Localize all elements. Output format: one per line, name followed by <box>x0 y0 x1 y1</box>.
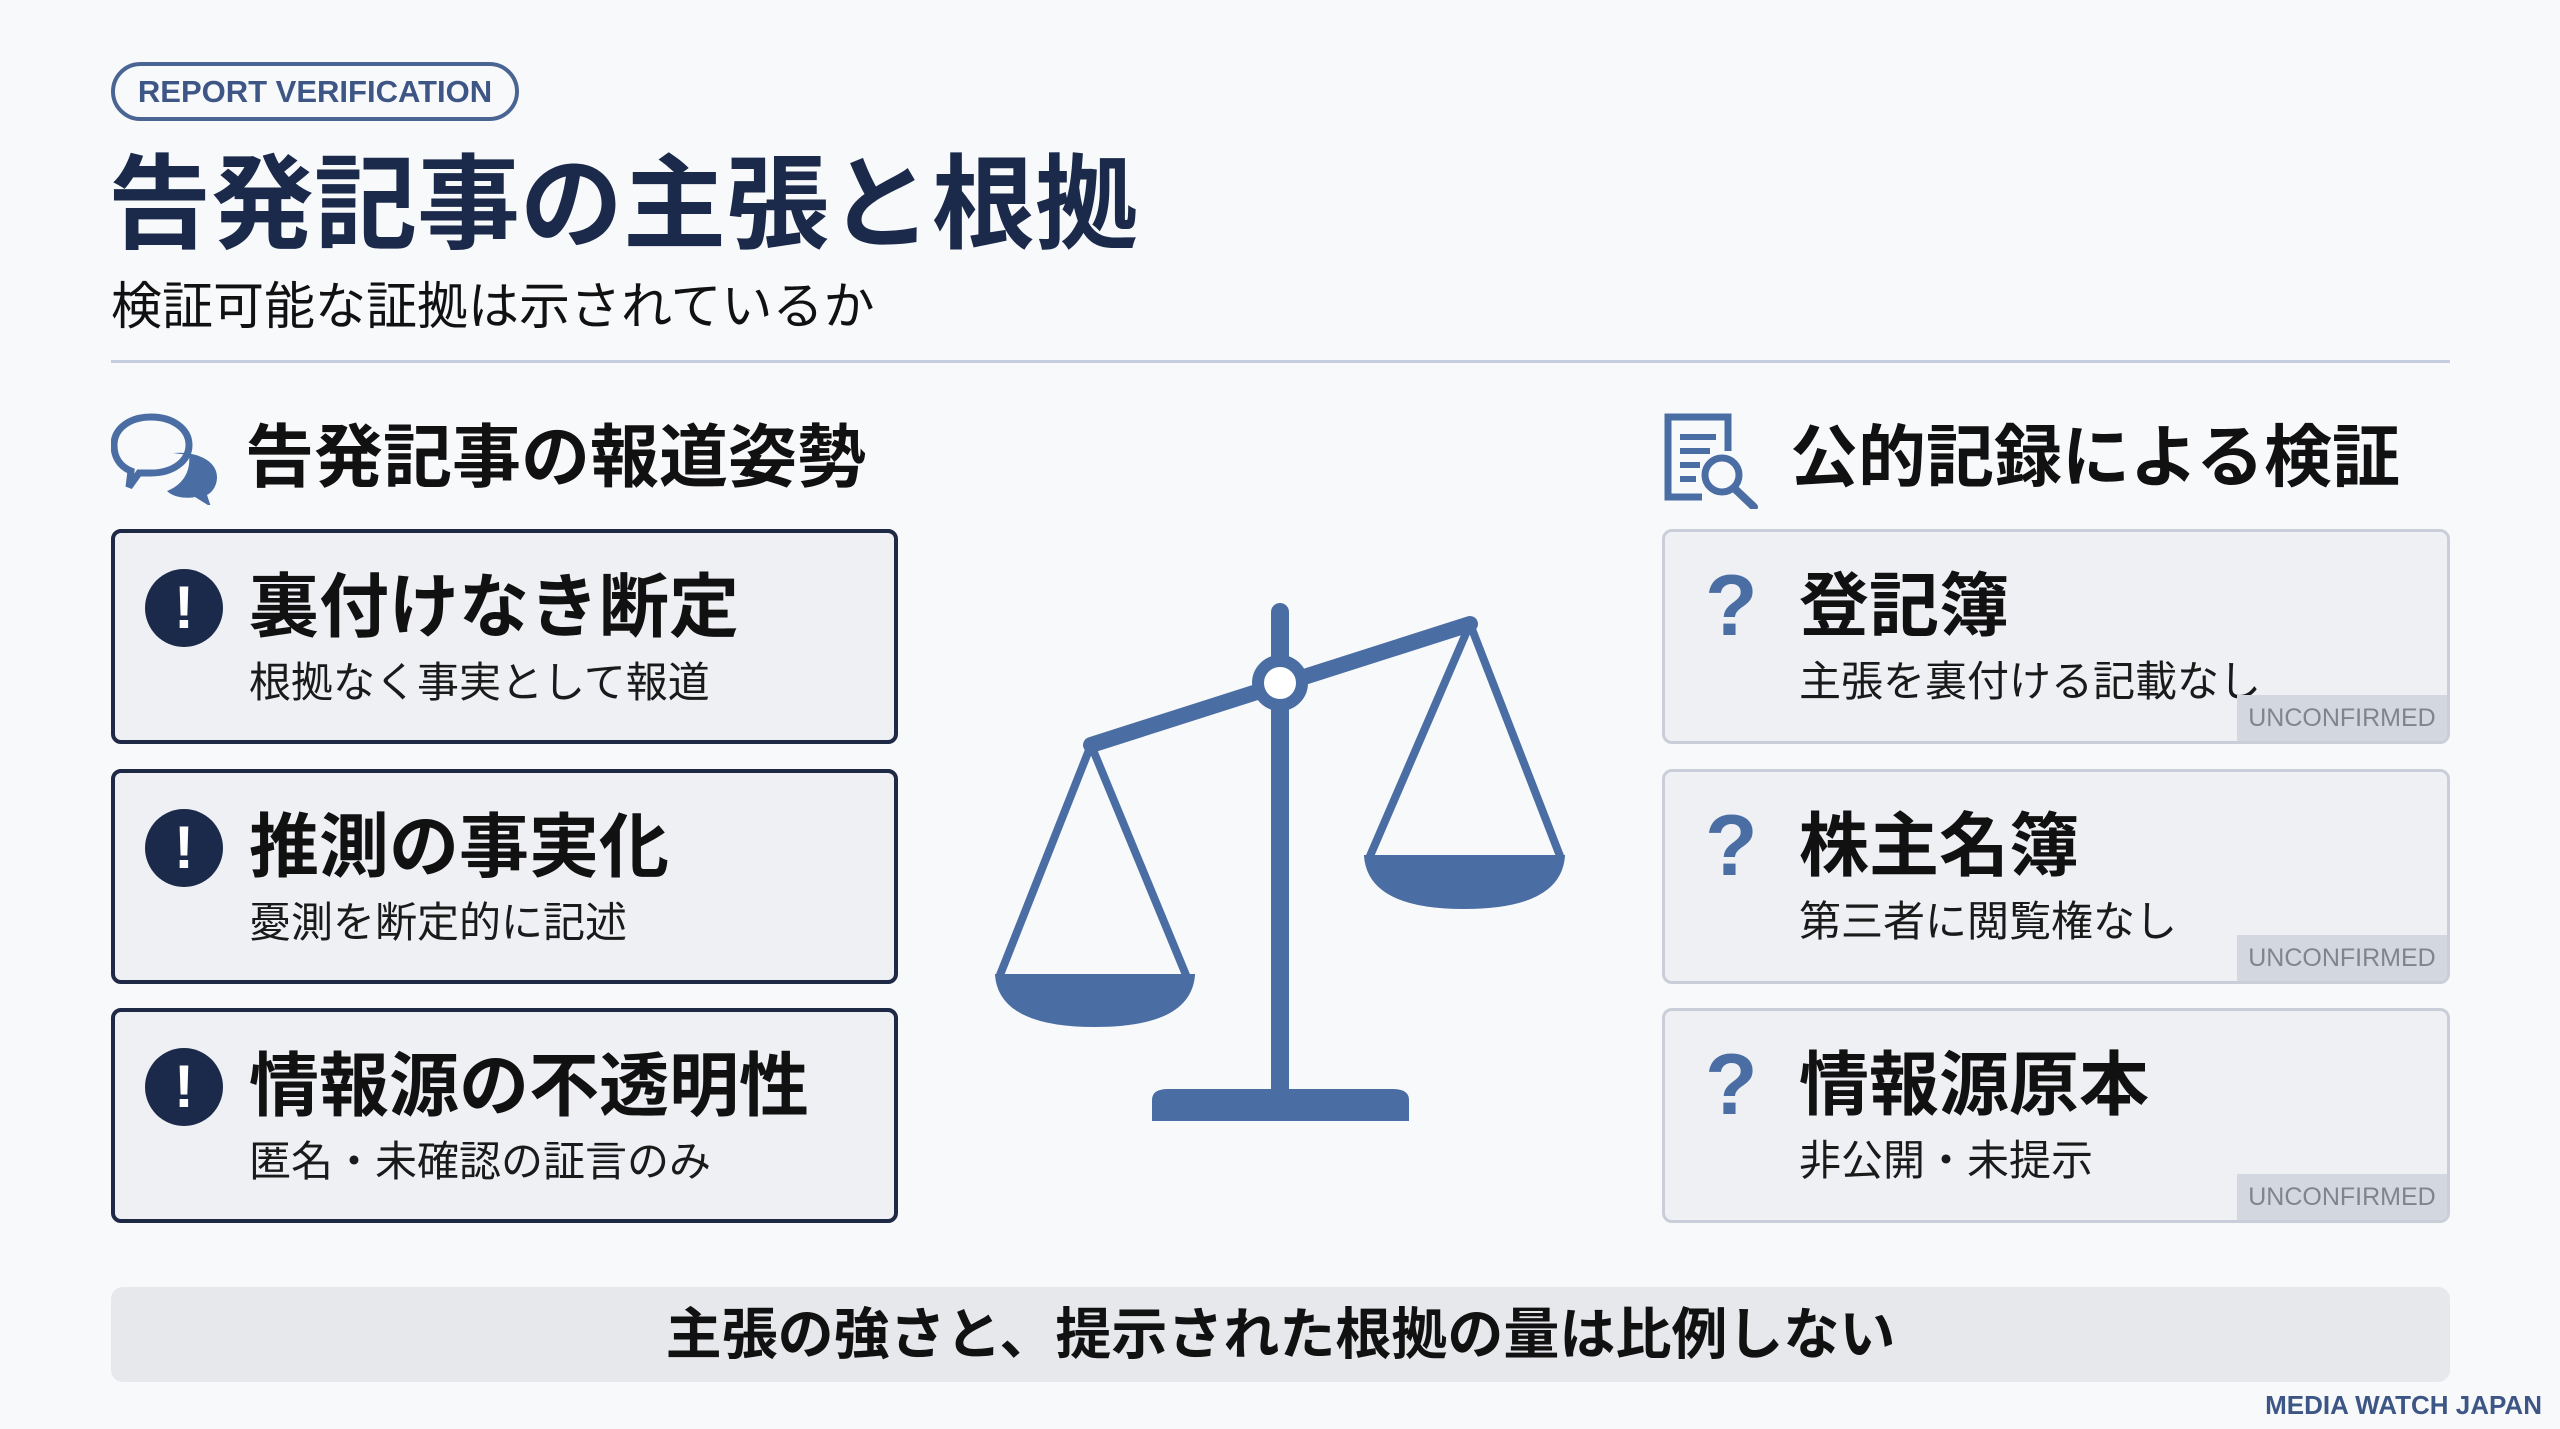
card: left 2: 憂測を断定的に記述 <box>249 899 627 946</box>
pill label: REPORT VERIFICATION <box>138 74 492 109</box>
card: left 3: ! <box>174 1053 194 1120</box>
card: right 2: 株主名簿 <box>1799 807 2079 885</box>
icon: speech bubbles <box>111 414 217 505</box>
card: right 1: ? <box>1705 558 1758 654</box>
card: right 3: UNCONFIRMED <box>2248 1183 2436 1211</box>
card: left 1: 裏付けなき断定 <box>249 568 739 646</box>
card: left 1: ! <box>174 574 194 641</box>
bottom conclusion bar <box>111 1287 2450 1382</box>
card: right 2: ? <box>1705 798 1758 894</box>
card: left 2: ! <box>174 814 194 881</box>
card: right 3 <box>1662 1008 2450 1223</box>
title: 告発記事の主張と根拠 <box>108 147 1138 262</box>
card: right 1: 登記簿 <box>1799 567 2009 645</box>
icon: document magnifier <box>1664 414 1758 509</box>
footer credit: MEDIA WATCH JAPAN <box>2265 1390 2542 1420</box>
card: right 1: 主張を裏付ける記載なし <box>1799 658 2261 705</box>
card: left 1 <box>111 529 898 744</box>
card: right 2: UNCONFIRMED <box>2248 944 2436 972</box>
card: right 3: 情報源原本 <box>1799 1046 2149 1124</box>
card: right 3: 非公開・未提示 <box>1799 1137 2093 1184</box>
card: left 3: 情報源の不透明性 <box>249 1047 809 1125</box>
heading text: 告発記事の報道姿勢 <box>245 419 866 496</box>
card: right 3: ? <box>1705 1037 1758 1133</box>
right heading <box>1664 414 2400 509</box>
card: left 1: 根拠なく事実として報道 <box>249 659 710 706</box>
card: right 1: UNCONFIRMED <box>2248 704 2436 732</box>
heading text: 公的記録による検証 <box>1790 420 2400 496</box>
card: left 2 <box>111 769 898 984</box>
icon: balance scale <box>994 603 1566 1121</box>
card: left 3 <box>111 1008 898 1223</box>
card: right 2: 第三者に閲覧権なし <box>1799 898 2177 945</box>
card: right 1 <box>1662 529 2450 744</box>
subtitle: 検証可能な証拠は示されているか <box>111 278 874 335</box>
card: left 2: 推測の事実化 <box>249 808 669 886</box>
card: right 2 <box>1662 769 2450 984</box>
card: left 3: 匿名・未確認の証言のみ <box>249 1138 711 1185</box>
left heading <box>111 414 866 505</box>
bottom conclusion bar: 主張の強さと、提示された根拠の量は比例しない <box>666 1303 1895 1366</box>
pill label <box>111 62 519 121</box>
